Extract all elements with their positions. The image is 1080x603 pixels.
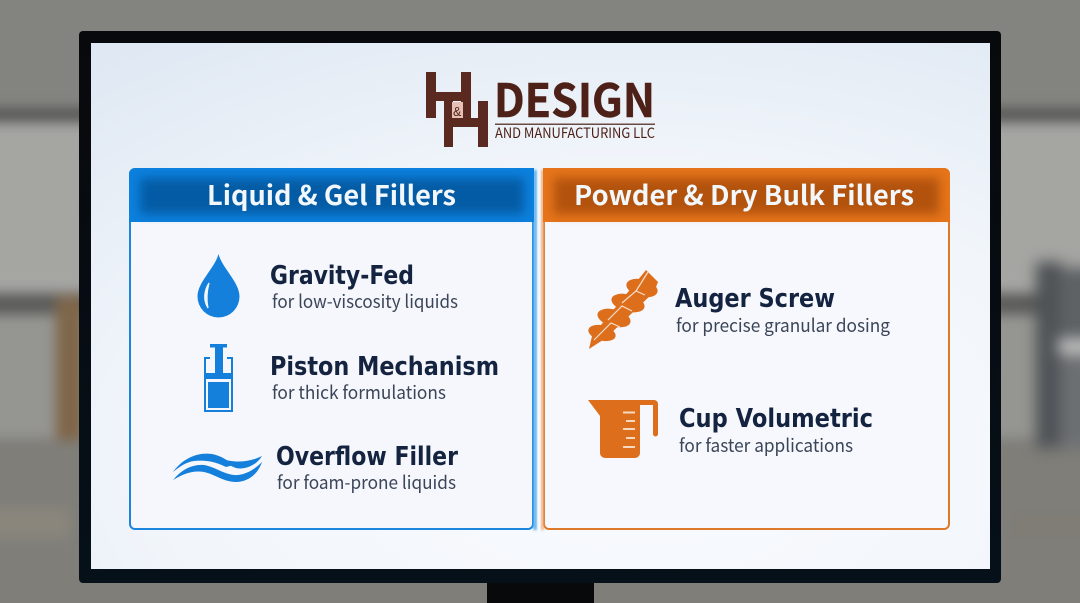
header: powder: Powder & Dry Bulk Fillers — [574, 174, 914, 213]
icon: water drop — [198, 254, 240, 318]
item: gravity-fed — [198, 254, 458, 318]
item: cup volumetric: Cup Volumetric — [679, 404, 873, 434]
item: piston mechanism — [204, 344, 499, 412]
icon: auger screw — [587, 270, 660, 349]
item: cup volumetric — [588, 400, 873, 458]
panel: powder and dry bulk fillers — [541, 168, 950, 530]
monitor screen — [91, 43, 990, 569]
logo wordmark: DESIGN — [494, 65, 655, 131]
item: piston mechanism: Piston Mechanism — [270, 352, 499, 382]
monitor stand — [487, 580, 594, 603]
logo mark: interlocked H H: & — [453, 105, 462, 119]
item: overflow filler — [173, 442, 458, 495]
item: overflow filler: for foam-prone liquids — [277, 469, 456, 495]
item: auger screw — [587, 270, 890, 349]
item: gravity-fed: Gravity-Fed — [270, 261, 414, 291]
header: liquid: Liquid & Gel Fillers — [207, 174, 456, 213]
panel: liquid and gel fillers — [129, 168, 537, 530]
item: cup volumetric: for faster applications — [679, 432, 853, 458]
item: piston mechanism: for thick formulations — [272, 379, 446, 405]
logo: H&H Design and Manufacturing LLC — [426, 65, 655, 147]
logo mark: interlocked H H — [426, 72, 488, 147]
icon: waves — [173, 454, 262, 482]
item: gravity-fed: for low-viscosity liquids — [272, 288, 458, 314]
header: powder — [543, 168, 950, 222]
icon: measuring cup — [588, 400, 658, 458]
item: auger screw: for precise granular dosing — [676, 312, 890, 338]
item: overflow filler: Overflow Filler — [276, 442, 458, 472]
header: liquid — [129, 168, 534, 222]
icon: piston — [204, 344, 233, 412]
logo tagline: AND MANUFACTURING LLC — [495, 123, 655, 143]
monitor bezel — [79, 31, 1001, 583]
item: auger screw: Auger Screw — [675, 284, 835, 314]
